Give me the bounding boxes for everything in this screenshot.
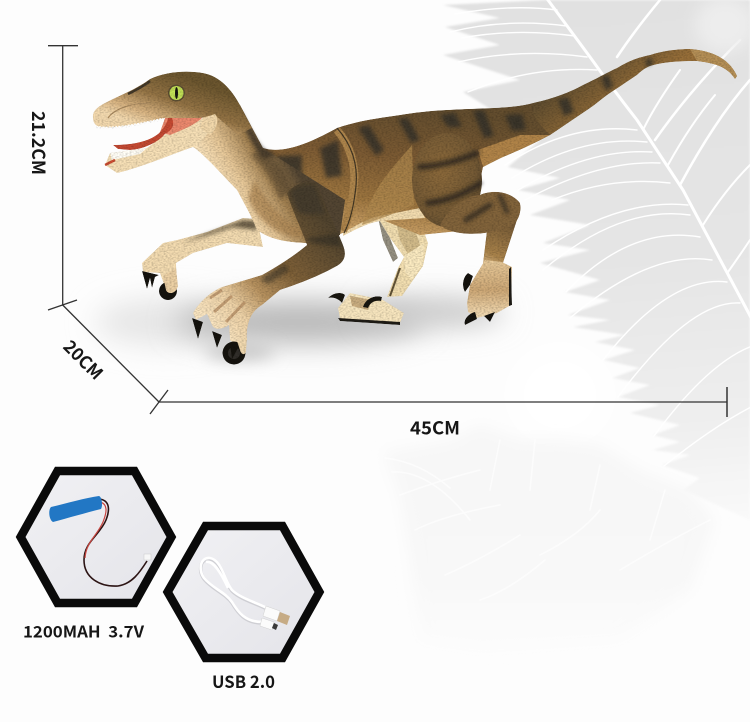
big arm wheel xyxy=(222,342,246,364)
body stripes xyxy=(276,58,653,186)
jaw joint xyxy=(200,114,217,135)
claws xyxy=(192,318,203,339)
small arm wheel xyxy=(159,282,177,300)
upper teeth xyxy=(96,119,163,128)
eye xyxy=(168,84,185,102)
lower teeth xyxy=(110,148,147,160)
head xyxy=(93,72,252,173)
lower jaw xyxy=(105,115,215,173)
tan flank panel xyxy=(362,145,414,225)
dinosaur ground shadow xyxy=(95,297,505,360)
lower thigh xyxy=(440,192,521,234)
label: battery: 1200MAH 3.7V xyxy=(23,618,144,642)
body and tail xyxy=(263,49,737,245)
far foot xyxy=(328,293,404,325)
far mechanical leg xyxy=(378,212,428,297)
background palm frond top right xyxy=(443,0,750,520)
thigh xyxy=(412,133,482,227)
label: length: 45CM xyxy=(410,414,460,440)
tongue xyxy=(113,118,173,150)
icon: USB plug xyxy=(263,606,290,625)
icon: battery wire red xyxy=(85,502,106,558)
thigh stripes xyxy=(420,153,507,220)
belly edge xyxy=(343,208,425,236)
body panel seam xyxy=(337,130,354,231)
background palm frond bottom, faint xyxy=(384,425,715,650)
near hind foot xyxy=(463,260,512,325)
small front arm xyxy=(142,218,263,300)
label: height: 21.2CM xyxy=(26,111,52,175)
icon: micro plug xyxy=(260,618,278,630)
battery hexagon xyxy=(21,471,171,603)
icon: battery cell xyxy=(49,496,102,522)
mouth interior xyxy=(160,117,203,135)
label: depth: 20CM xyxy=(58,334,109,385)
label: USB: USB 2.0 xyxy=(212,668,275,693)
icon: battery wire xyxy=(84,499,147,586)
neck and chest xyxy=(193,105,345,243)
near hind shank xyxy=(483,220,517,263)
hip underside highlight xyxy=(478,135,550,167)
icon: USB cable shadow xyxy=(201,559,267,623)
USB hexagon xyxy=(168,526,319,658)
big front arm xyxy=(192,182,345,364)
dimension lines xyxy=(48,46,727,417)
icon: battery connector xyxy=(144,554,151,560)
skull xyxy=(93,72,252,135)
dinosaur toy xyxy=(93,49,737,364)
icon: USB cable xyxy=(201,558,267,622)
